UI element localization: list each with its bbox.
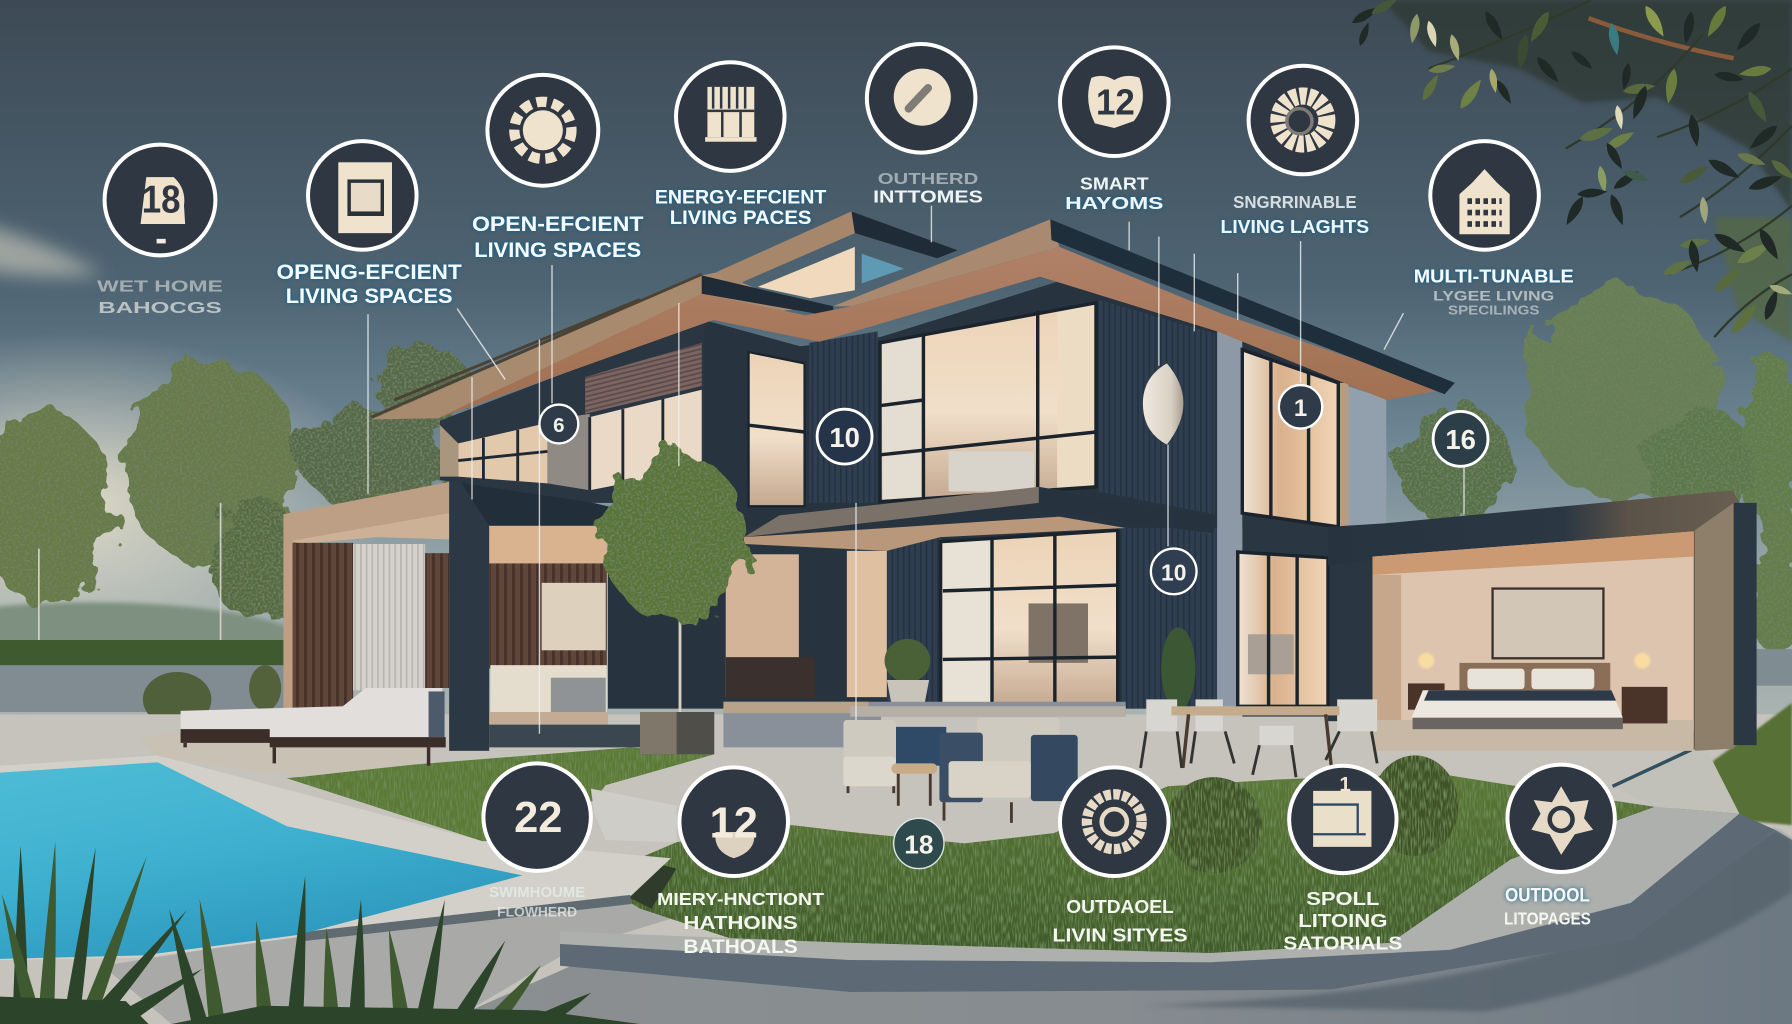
- wood screen on left wing: [585, 343, 702, 414]
- background trees left: [0, 345, 471, 623]
- callout: outdoor living icon: LIVIN SITYES: [1053, 925, 1187, 946]
- ground floor interior: [726, 530, 1328, 710]
- lawn shadow edge: [591, 859, 677, 909]
- main roof dark fascia right: [1050, 219, 1455, 394]
- plant by column: [1161, 627, 1195, 710]
- left wing windows: [458, 390, 702, 490]
- callout: smart homes: 12: [1096, 81, 1135, 122]
- callout: flower bulb icon: LIVING LAGHTS: [1221, 216, 1369, 237]
- callout: outdoor spaces icon: [1504, 765, 1615, 929]
- hedge and fence: [0, 640, 1792, 766]
- balcony slab: [744, 487, 1211, 537]
- curb top: [560, 807, 1739, 962]
- outdoor armchair right: [939, 718, 1078, 823]
- upper centre window: [880, 303, 1096, 502]
- left wing roof shingle lines: [371, 274, 702, 417]
- marker 10 balcony: 10: [829, 422, 860, 453]
- tree trunks left: [39, 503, 221, 706]
- clerestory window: [758, 247, 855, 298]
- callout: flower bulb icon: SNGRRINABLE: [1233, 192, 1357, 212]
- distant hill: [0, 602, 309, 689]
- callout: wet home bathrooms: WET HOME: [97, 278, 223, 295]
- callout: tablet icon: [277, 141, 462, 308]
- callout: smart homes: [1060, 47, 1169, 213]
- callout: 22 swimming pool: FLOWHERD: [497, 905, 577, 920]
- callout: facade icon: MULTI-TUNABLE: [1414, 265, 1574, 286]
- clerestory blue pane: [862, 254, 904, 283]
- pool deck: [0, 755, 671, 960]
- clerestory roof: [717, 211, 958, 287]
- upper right window: [1242, 350, 1338, 527]
- callout: sun icon: [472, 75, 644, 262]
- back lawn strip: [287, 747, 714, 841]
- callout: outdoor living icon: [1053, 767, 1187, 946]
- ground: concrete base: [0, 714, 1792, 1024]
- callout: outdoor living icon: OUTDAOEL: [1066, 896, 1174, 917]
- house body: [440, 280, 1386, 721]
- road shadow: [1143, 830, 1792, 1011]
- topiary shrubs: [1166, 755, 1458, 873]
- swimming pool: [0, 762, 522, 959]
- left pavilion: [283, 478, 640, 751]
- callout: tablet icon: LIVING SPACES: [286, 283, 453, 308]
- top right tree foliage: [1350, 0, 1792, 343]
- path beside pool: [103, 899, 686, 1024]
- callout: facade icon: LYGEE LIVING: [1433, 289, 1554, 304]
- oval wall window: [1143, 363, 1183, 445]
- callout: 12 bathrooms: BATHOALS: [683, 936, 798, 958]
- callout: materials icon: 1: [1339, 773, 1351, 796]
- road: [440, 830, 1792, 1024]
- main copper soffit: [438, 247, 1445, 418]
- pool shadow edge: [298, 899, 631, 937]
- callout: flower bulb icon: [1221, 66, 1369, 237]
- left wing roof edge: [371, 272, 800, 419]
- callout: 12 bathrooms: [657, 767, 825, 958]
- roofs: [371, 211, 1455, 419]
- terrace under lounge chairs: [137, 731, 434, 777]
- callout: materials icon: SATORIALS: [1283, 933, 1402, 954]
- callout: materials icon: [1283, 766, 1402, 954]
- callout: dial icon: INTTOMES: [873, 186, 983, 206]
- potted plant: [885, 639, 930, 710]
- marker 18: [894, 818, 944, 869]
- callout: facade icon: [1414, 141, 1574, 317]
- marker 16: 16: [1445, 424, 1476, 455]
- right garden plant: [1669, 703, 1792, 825]
- callout: 22 swimming pool: [483, 763, 591, 920]
- leader lines: [368, 206, 1464, 734]
- sapling in planter: [603, 451, 745, 754]
- outdoor armchair left: [843, 720, 946, 793]
- marker 18: 18: [904, 830, 933, 860]
- marker 1: 1: [1294, 395, 1307, 422]
- callout: outdoor spaces icon: LITOPAGES: [1504, 909, 1591, 929]
- callout: wet home bathrooms: 18: [142, 179, 181, 222]
- callout: smart homes: HAYOMS: [1065, 193, 1163, 213]
- callout: smart homes: SMART: [1080, 174, 1149, 194]
- walkway right: [1613, 752, 1739, 814]
- marker 10 lower: [1151, 549, 1197, 594]
- clerestory dark ridge: [851, 211, 958, 258]
- callout: wet home bathrooms: [97, 145, 223, 317]
- callout: wet home bathrooms: BAHOCGS: [98, 300, 222, 317]
- balcony navy band: [1039, 487, 1214, 534]
- clerestory dark fascia: [702, 275, 833, 317]
- callout: facade icon: SPECILINGS: [1448, 303, 1539, 317]
- callout: 12 bathrooms: MIERY-HNCTIONT: [657, 889, 825, 909]
- balcony soffit: [744, 517, 1126, 551]
- callout: 12 bathrooms: HATHOINS: [683, 912, 798, 933]
- callout: 22 swimming pool: 22: [514, 794, 562, 842]
- right pavilion bedroom: [1328, 490, 1757, 751]
- marker 6: 6: [553, 414, 565, 437]
- callout: materials icon: SPOLL: [1306, 888, 1379, 909]
- marker 10 balcony: [817, 409, 872, 464]
- main roof tan lip: [833, 219, 1059, 306]
- lawn front: [591, 774, 1655, 953]
- callout: materials icon: LITOING: [1298, 910, 1387, 931]
- foreground spiky plants: [0, 841, 640, 1024]
- entry steps: [723, 702, 1126, 747]
- callout: sun icon: OPEN-EFCIENT: [472, 211, 644, 236]
- lounge chairs: [181, 688, 446, 766]
- background trees right: [1397, 286, 1792, 657]
- callout: window icon: LIVING PACES: [670, 207, 811, 229]
- callout: 12 bathrooms: 12: [710, 800, 758, 848]
- marker 1: [1279, 385, 1322, 429]
- curb face: [560, 814, 1775, 992]
- callout: outdoor spaces icon: OUTDOOL: [1505, 885, 1590, 907]
- marker 10 lower: 10: [1161, 560, 1186, 586]
- side table: [891, 763, 937, 806]
- pool steps: [591, 789, 677, 842]
- callout: 22 swimming pool: SWIMHOUME: [489, 885, 585, 901]
- callout: window icon: [655, 62, 826, 229]
- upper left window: [749, 352, 805, 506]
- callout: tablet icon: OPENG-EFCIENT: [277, 259, 462, 284]
- dining set: [1141, 699, 1377, 777]
- marker 6: [539, 405, 578, 443]
- marker 16: [1433, 411, 1488, 466]
- callout: dial icon: OUTHERD: [878, 171, 978, 188]
- callout: window icon: ENERGY-EFCIENT: [655, 186, 826, 208]
- blue drain edge: [1613, 750, 1691, 786]
- callout: dial icon: [867, 44, 983, 206]
- callout: sun icon: LIVING SPACES: [474, 237, 641, 262]
